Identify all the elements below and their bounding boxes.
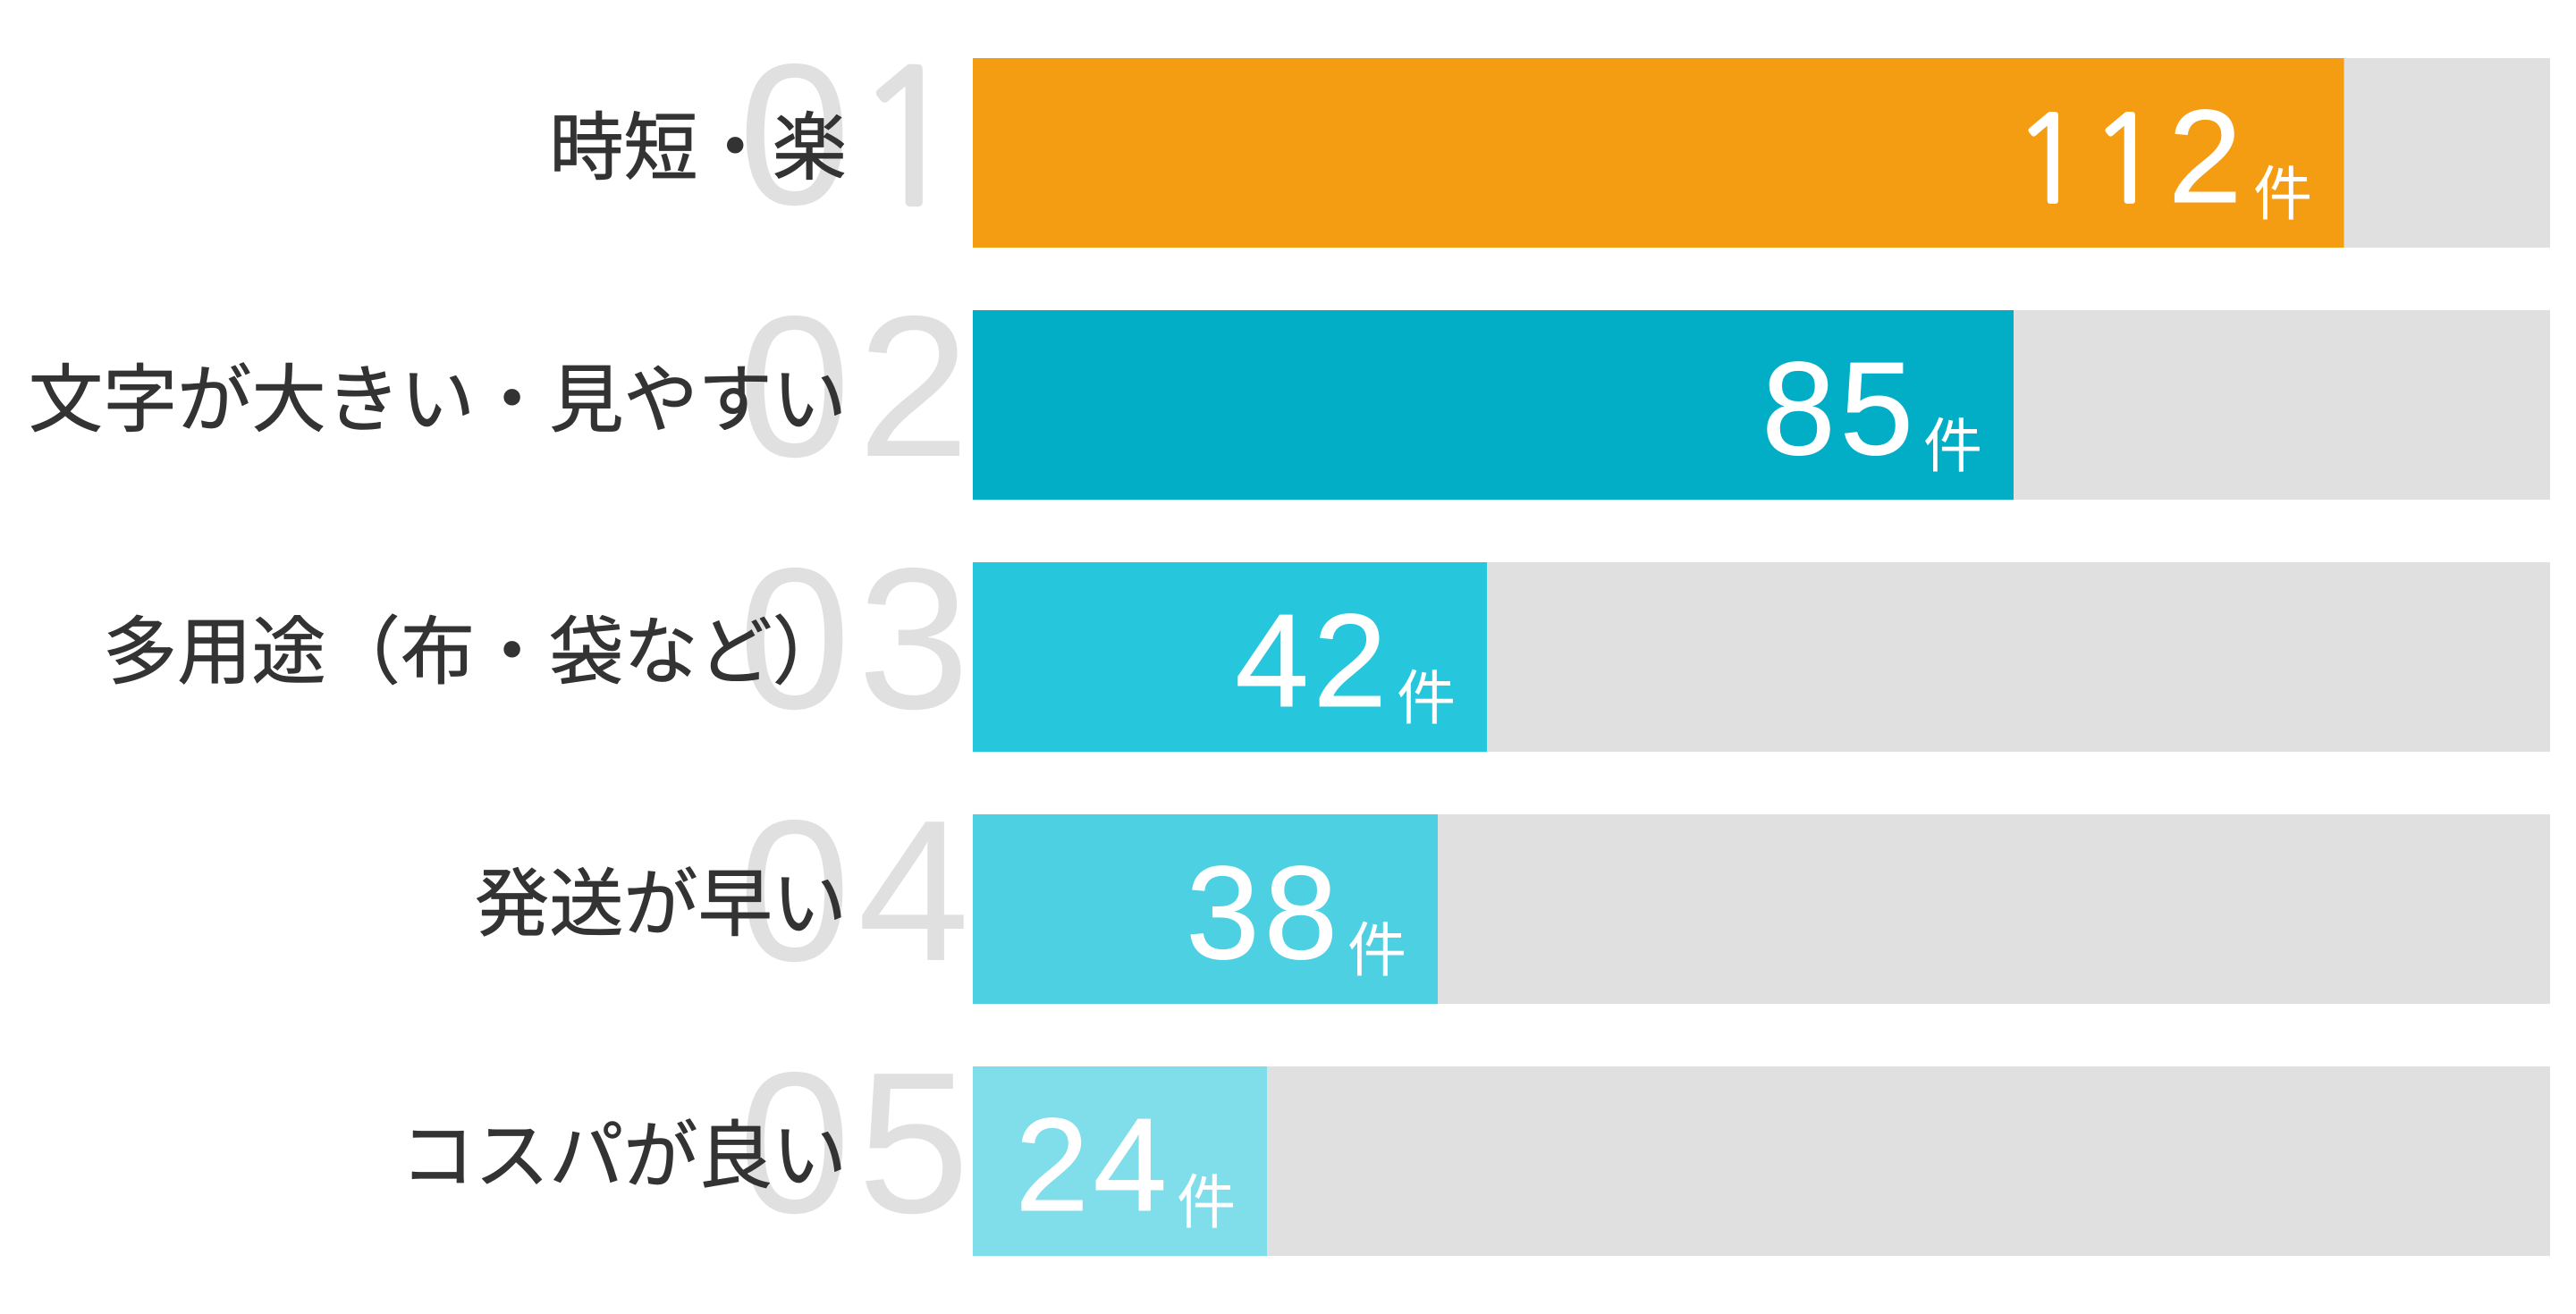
unit 4: 件: [1347, 903, 1406, 989]
value 112: 2: [2168, 83, 2246, 231]
rank number 01: 1: [852, 46, 964, 231]
rank number 03: 03: [739, 526, 976, 751]
unit 3: 件: [1397, 651, 1456, 737]
track 5: [973, 1066, 2550, 1256]
row 1: 時短・楽: [549, 21, 2550, 248]
bar 5: [973, 1066, 1267, 1256]
track 4: [973, 814, 2550, 1004]
rank number 05: 05: [739, 1030, 976, 1255]
label 2: 文字が大きい・見やすい: [29, 339, 847, 447]
track 2: [973, 310, 2550, 500]
track 1: [973, 58, 2550, 248]
row 4: 発送が早い: [475, 778, 2550, 1004]
bar 3: [973, 562, 1487, 752]
value 42: 42: [1235, 587, 1391, 735]
label 5: コスパが良い: [401, 1095, 847, 1203]
unit 1: 件: [2253, 147, 2312, 232]
value 38: 38: [1186, 839, 1342, 987]
track 3: [973, 562, 2550, 752]
row 2: 文字が大きい・見やすい: [29, 274, 2550, 500]
unit 2: 件: [1923, 399, 1982, 484]
bar 1: [973, 58, 2344, 248]
value 112: 11: [2013, 100, 2162, 220]
label 4: 発送が早い: [475, 843, 847, 951]
label 3: 多用途（布・袋など）: [103, 591, 847, 699]
value 85: 85: [1761, 335, 1918, 483]
label 1: 時短・楽: [549, 87, 847, 195]
row 5: コスパが良い: [401, 1030, 2550, 1256]
bar 4: [973, 814, 1438, 1004]
row 3: 多用途（布・袋など）: [103, 526, 2550, 752]
unit 5: 件: [1177, 1155, 1236, 1241]
rank number 04: 04: [739, 778, 976, 1003]
bar 2: [973, 310, 2014, 500]
value 24: 24: [1015, 1091, 1171, 1239]
rank number 01: 0: [739, 21, 857, 247]
rank number 02: 02: [739, 274, 976, 499]
